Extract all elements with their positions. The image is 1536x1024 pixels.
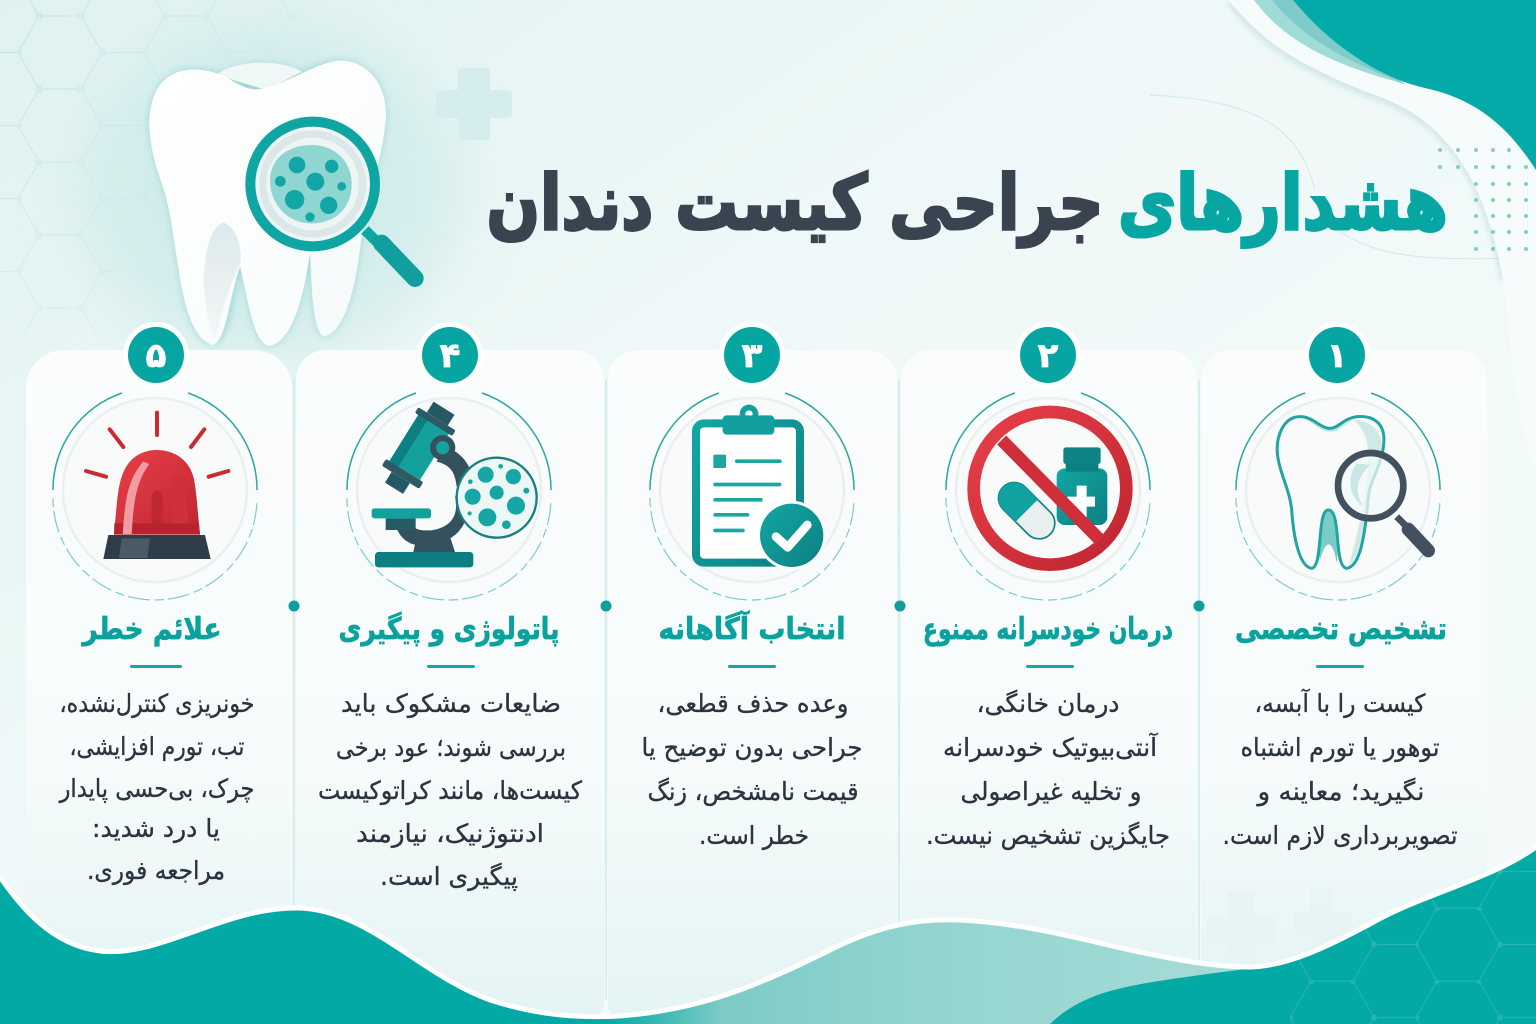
panel: cards background — [26, 350, 1487, 1024]
step number badge — [123, 322, 189, 388]
body text: توهور یا تورم اشتباه — [1240, 733, 1440, 762]
step number badge — [1304, 322, 1370, 388]
icon frame — [946, 393, 1150, 600]
body text: تب، تورم افزایشی، — [70, 732, 245, 761]
body text: بررسی شوند؛ عود برخی — [336, 733, 566, 762]
step number badge: ۱ — [1327, 336, 1347, 376]
panel: step 5 — [53, 322, 257, 885]
panel: step 3 — [642, 322, 862, 850]
panel 2 card — [901, 350, 1197, 1024]
connector dots — [288, 600, 1204, 612]
hexagon pattern top left — [0, 0, 300, 340]
step number badge: ۳ — [742, 336, 763, 376]
body text: خطر است. — [699, 821, 809, 850]
body text — [1222, 688, 1458, 850]
soft tint behind tooth — [80, 20, 460, 360]
body text: کیست را با آبسه، — [1254, 688, 1426, 718]
body text: تصویربرداری لازم است. — [1222, 821, 1458, 850]
step number badge: ۲ — [1038, 336, 1059, 376]
body text — [58, 689, 255, 885]
body text: جراحی بدون توضیح یا — [642, 733, 862, 763]
icon frame — [347, 393, 551, 600]
panel 3 card — [608, 350, 897, 1024]
icon: large tooth with magnifier — [149, 61, 415, 346]
panel 1 card — [1201, 350, 1487, 1024]
body text: کیست‌ها، مانند کراتوکیست — [318, 776, 582, 805]
panel: step 4 — [318, 322, 582, 891]
body text: و تخلیه غیراصولی — [960, 777, 1142, 807]
body text: قیمت نامشخص، زنگ — [648, 777, 858, 806]
title: highlighted word: هشدارهای — [1118, 158, 1448, 248]
body text: مراجعه فوری. — [87, 856, 225, 885]
step number badge — [1015, 322, 1081, 388]
panel: step 2 — [923, 322, 1173, 850]
heading: علائم خطر — [81, 612, 222, 647]
title: dark words: جراحی کیست دندان — [486, 158, 1104, 248]
panel 4 card — [296, 350, 604, 1024]
step number badge: ۵ — [146, 336, 166, 376]
body text: وعده حذف قطعی، — [658, 689, 848, 719]
body text: چرک، بی‌حسی پایدار — [58, 774, 255, 803]
title — [486, 158, 1448, 248]
body text: آنتی‌بیوتیک خودسرانه — [943, 732, 1158, 762]
icon: red alarm siren — [86, 413, 228, 559]
body text: خونریزی کنترل‌نشده، — [60, 689, 254, 718]
icon frame — [1236, 393, 1440, 600]
step number badge: ۴ — [440, 336, 460, 376]
icon: tooth and magnifier — [1277, 416, 1428, 568]
panel: step 1 — [1222, 322, 1458, 850]
body text: جایگزین تشخیص نیست. — [926, 821, 1170, 850]
body text — [642, 689, 862, 850]
heading: تشخیص تخصصی — [1235, 612, 1447, 647]
body text: ادنتوژنیک، نیازمند — [356, 819, 544, 848]
body text: ضایعات مشکوک باید — [341, 689, 561, 718]
body text: درمان خانگی، — [976, 689, 1120, 718]
body text — [318, 689, 582, 891]
icon: microscope and cells — [372, 396, 537, 567]
bottom wave — [0, 835, 1536, 1024]
body text: یا درد شدید: — [92, 814, 220, 843]
heading: انتخاب آگاهانه — [658, 610, 846, 647]
panel 5 card — [26, 350, 292, 1024]
icon: clipboard with check — [696, 405, 826, 570]
icon: no self-medication — [974, 412, 1126, 565]
body text: پیگیری است. — [380, 862, 518, 891]
top right corner shape — [1228, 0, 1536, 470]
body text: نگیرید؛ معاینه و — [1255, 777, 1424, 807]
icon frame — [650, 393, 854, 600]
dot grid — [1438, 148, 1528, 251]
step number badge — [417, 322, 483, 388]
bottom crosses — [1206, 888, 1352, 968]
step number badge — [719, 322, 785, 388]
icon: decorative medical cross — [436, 68, 512, 140]
icon frame — [53, 393, 257, 600]
body text — [926, 689, 1170, 850]
heading: درمان خودسرانه ممنوع — [923, 612, 1173, 647]
heading: پاتولوژی و پیگیری — [338, 611, 560, 647]
decorative thin line near title — [1150, 95, 1510, 259]
